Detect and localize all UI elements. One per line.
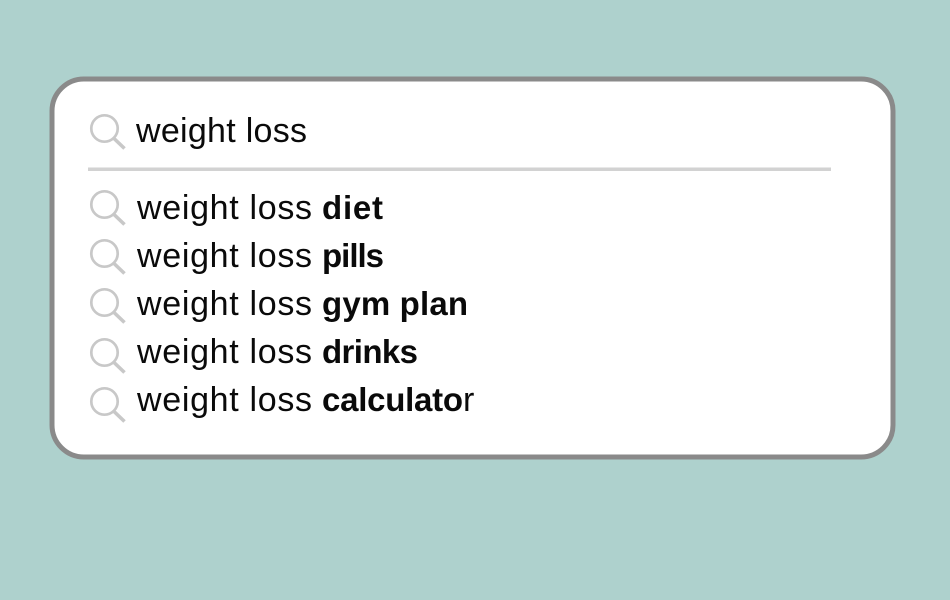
suggestion: calculator: r <box>463 381 474 419</box>
suggestion: calculator: calculato <box>322 381 463 418</box>
suggestion: drinks: drinks <box>322 333 418 370</box>
suggestion: drinks <box>91 333 418 372</box>
suggestion: diet <box>91 189 383 227</box>
suggestion: pills <box>91 237 384 275</box>
search query text: weight loss <box>135 112 307 150</box>
suggestion: calculator <box>91 381 474 422</box>
icon: search query magnifier <box>91 115 124 148</box>
suggestion: pills: weight loss <box>136 237 312 275</box>
suggestion: pills: pills <box>322 237 384 274</box>
divider line <box>88 168 831 171</box>
suggestion: diet: diet <box>322 189 383 226</box>
suggestion: gym plan: gym plan <box>322 285 468 322</box>
suggestion: calculator: weight loss <box>136 381 312 419</box>
panel: search box <box>52 79 893 457</box>
suggestion: gym plan <box>91 285 468 323</box>
suggestion: drinks: weight loss <box>136 333 312 371</box>
suggestion: gym plan: weight loss <box>136 285 312 323</box>
suggestion: diet: weight loss <box>136 189 312 227</box>
